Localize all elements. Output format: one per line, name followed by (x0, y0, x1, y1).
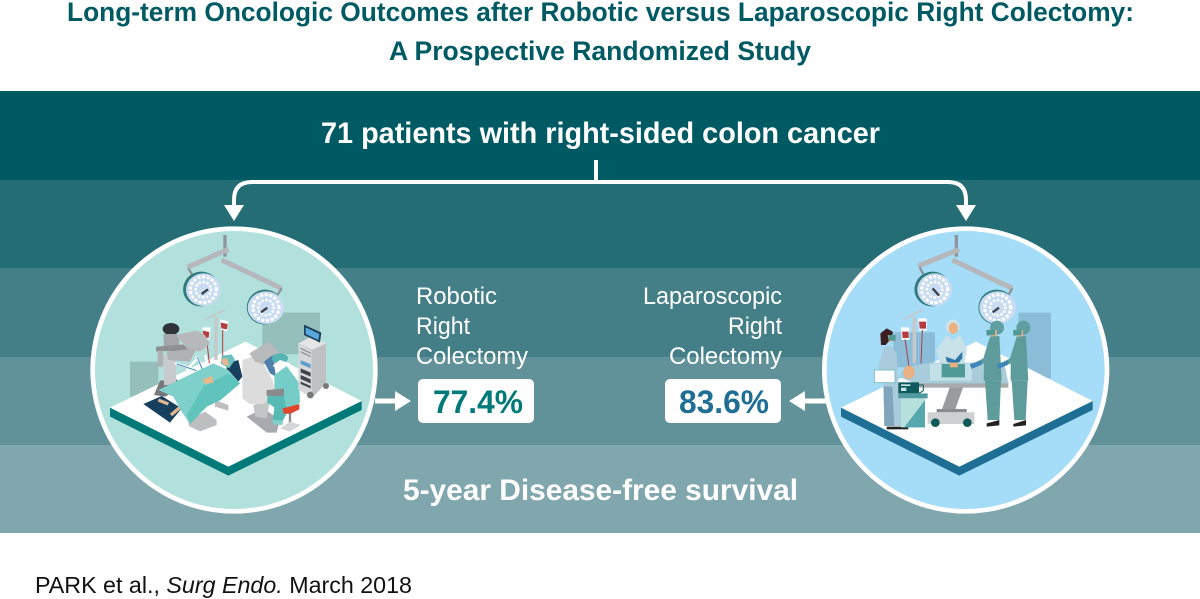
IV stand (202, 310, 228, 363)
heading: patient population: 71 patients with right-sided colon cancer (321, 117, 880, 150)
surgeon console (242, 342, 285, 433)
title (67, 0, 1134, 66)
anesthesia machine (898, 382, 928, 427)
label: laparoscopic arm: Colectomy (669, 343, 782, 370)
label: robotic arm: Robotic (416, 283, 497, 310)
platform (841, 342, 1093, 476)
patient on table (143, 354, 242, 431)
platform (110, 342, 362, 476)
robot arm cart (154, 323, 210, 397)
label: laparoscopic arm: Right (728, 313, 782, 340)
arrow: split into two arms (224, 160, 976, 221)
assistant surgeon two (997, 321, 1030, 427)
stat: robotic 77.4%: 77.4% (433, 384, 523, 420)
panel: laparoscopic operating room illustration (824, 229, 1107, 511)
panel: robotic operating room illustration (93, 229, 375, 511)
arrow: robotic to result (375, 391, 411, 411)
stat: robotic 77.4% (418, 379, 534, 423)
label: robotic arm: Right (416, 313, 470, 340)
citation: PARK et al., Surg Endo. March 2018 (35, 572, 412, 598)
arrow: laparoscopic to result (789, 391, 826, 411)
operating table and patient (898, 363, 1008, 427)
IV stand (901, 309, 927, 367)
title: A Prospective Randomized Study (389, 36, 811, 66)
surgeon seated (267, 353, 301, 432)
stat: laparoscopic 83.6% (665, 379, 781, 423)
monitor tower (298, 325, 329, 398)
label: laparoscopic arm: Laparoscopic (643, 283, 782, 310)
surgeon behind table (936, 320, 967, 365)
stat: laparoscopic 83.6%: 83.6% (679, 384, 769, 420)
label: robotic arm: Colectomy (416, 343, 528, 370)
surgical lamps (909, 235, 1019, 329)
standing doctor with clipboard (874, 328, 908, 429)
assistant surgeon one (970, 321, 1004, 427)
banded background panel (0, 91, 1200, 533)
surgical lamps (178, 235, 288, 329)
heading: outcome measure: 5-year Disease-free survival (403, 474, 798, 507)
